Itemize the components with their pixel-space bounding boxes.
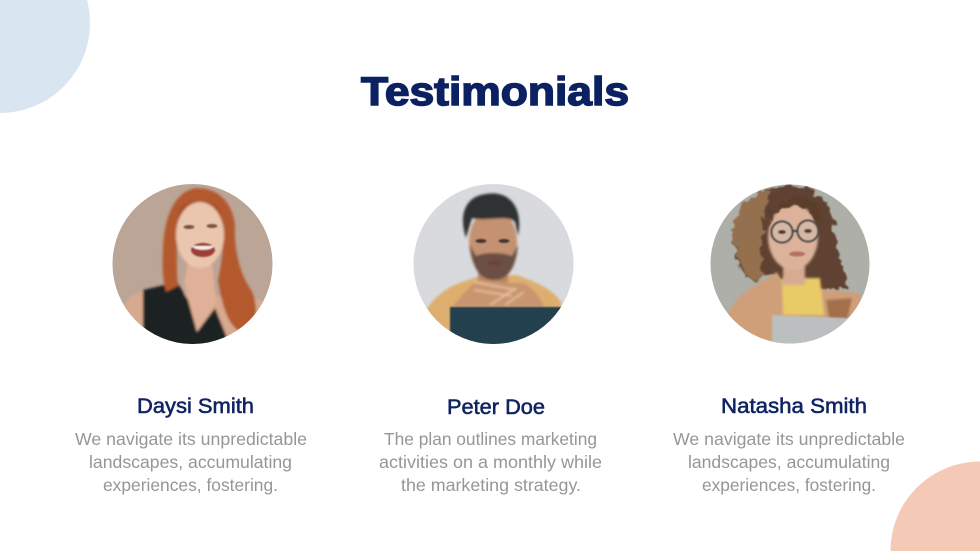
quote [379, 429, 602, 495]
quote: The plan outlines marketing [384, 429, 597, 449]
quote [75, 429, 307, 495]
name: Natasha Smith [721, 395, 867, 418]
quote: the marketing strategy. [401, 475, 581, 495]
name: Daysi Smith [137, 395, 254, 418]
quote: We navigate its unpredictable [75, 429, 307, 449]
testimonial: Peter Doe [379, 180, 602, 495]
quote [673, 429, 905, 495]
decorative circle: top left [0, 0, 90, 113]
portrait: Daysi Smith [110, 180, 275, 350]
portrait: Natasha Smith [708, 180, 873, 350]
quote: activities on a monthly while [379, 452, 602, 472]
decorative circle: bottom right [890, 462, 980, 551]
name: Peter Doe [447, 396, 545, 419]
quote: landscapes, accumulating [688, 452, 890, 472]
quote: We navigate its unpredictable [673, 429, 905, 449]
title: Testimonials [361, 70, 629, 114]
quote: landscapes, accumulating [89, 452, 292, 472]
testimonial: Natasha Smith [673, 180, 905, 495]
quote: experiences, fostering. [702, 475, 876, 495]
testimonial: Daysi Smith [75, 180, 307, 495]
portrait: Peter Doe [414, 184, 574, 344]
quote: experiences, fostering. [103, 475, 278, 495]
